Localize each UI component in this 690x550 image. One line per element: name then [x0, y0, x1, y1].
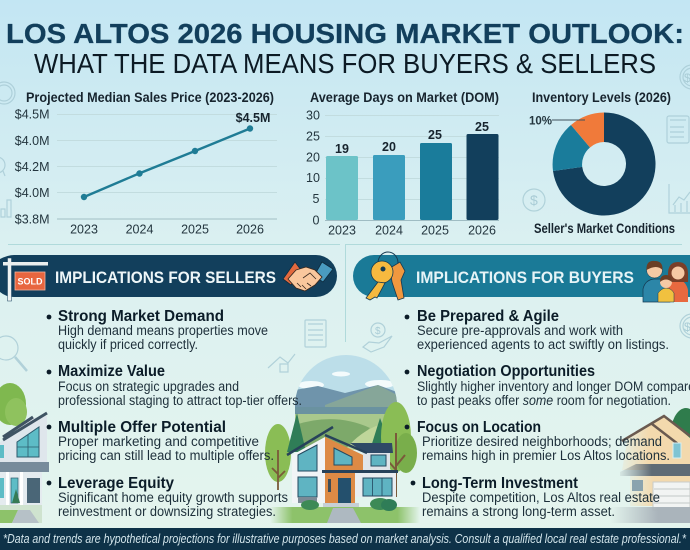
bar chart y axis labels: 10 [306, 171, 320, 185]
left tree [265, 424, 291, 490]
buyer item: focus on location: Focus on Location [417, 419, 541, 436]
buyer item: long-term investment: Despite competition, Los Altos real estate [422, 490, 660, 505]
icon: handshake [283, 262, 333, 291]
sellers heading: IMPLICATIONS FOR SELLERS [55, 268, 276, 287]
bar chart y axis labels: 25 [306, 130, 320, 144]
donut chart: inventory levels [529, 90, 675, 236]
line chart: projected median sales price [15, 90, 277, 236]
buyer item: be prepared and agile: experienced agents to act swiftly on listings. [417, 337, 669, 352]
seller item: multiple offer potential [47, 419, 274, 463]
buyer item: focus on location: Prioritize desired neighborhoods; demand [422, 434, 662, 449]
buyer item: long-term investment: remains a strong long-term asset. [422, 504, 615, 519]
seller item: maximize value: professional staging to attract top-tier offers. [58, 393, 302, 408]
panel: buyer implications list [405, 308, 690, 519]
bar x axis labels [328, 224, 496, 238]
icon: sold sign: SOLD [17, 276, 43, 286]
title line 1: LOS ALTOS 2026 HOUSING MARKET OUTLOOK: [6, 18, 684, 49]
bar value labels: 19 [335, 142, 349, 156]
price trend line [81, 125, 253, 200]
end value label: $4.5M [236, 111, 270, 125]
dollar signs on icons: $ [375, 326, 381, 337]
bar x axis labels: 2026 [468, 224, 496, 238]
bar x axis labels: 2025 [421, 224, 449, 238]
ground and path [270, 498, 420, 523]
donut callout [529, 116, 585, 128]
seller item: strong market demand [47, 308, 268, 352]
donut segments [553, 112, 656, 215]
bar chart heading: Average Days on Market (DOM) [310, 90, 499, 105]
bar chart: average days on market [306, 90, 499, 238]
bar chart y axis labels: 5 [313, 192, 320, 206]
seller item: maximize value: Focus on strategic upgrades and [58, 379, 239, 394]
seller item: maximize value: Maximize Value [58, 363, 165, 380]
line chart y axis labels [15, 108, 50, 226]
modern house [287, 427, 398, 508]
seller item: strong market demand: Strong Market Demand [58, 308, 224, 325]
bars [326, 134, 498, 220]
line chart x axis labels: 2023 [70, 222, 98, 236]
icon: family [643, 261, 688, 302]
buyer item: negotiation opportunities: Negotiation Opportunities [417, 363, 595, 380]
bar value labels: 25 [475, 120, 489, 134]
bar x axis labels: 2024 [375, 224, 403, 238]
buyer item: be prepared and agile [405, 308, 669, 352]
icon: keys [366, 252, 405, 300]
buyer item: long-term investment [411, 475, 660, 519]
dollar signs on icons [375, 71, 690, 337]
bar chart y axis labels: 0 [313, 214, 320, 228]
buyer item: focus on location: remains high in premier Los Altos locations. [422, 448, 670, 463]
donut callout: 10% [529, 116, 552, 128]
line chart y axis labels: $4.0M [15, 186, 50, 200]
line chart x axis labels [70, 222, 264, 236]
banner: sellers [0, 255, 337, 301]
illustration: central landscape [265, 355, 420, 523]
line chart y axis labels: $3.8M [15, 212, 50, 226]
bar value labels: 25 [428, 128, 442, 142]
faint finance icons [0, 65, 690, 372]
line chart y axis labels: $4.0M [15, 134, 50, 148]
buyer item: negotiation opportunities [405, 363, 690, 408]
bar chart y axis labels: 30 [306, 108, 320, 122]
seller item: strong market demand: High demand means properties move [58, 323, 268, 338]
buyer item: be prepared and agile: Secure pre-approvals and work with [417, 323, 623, 338]
seller item: leverage equity: reinvestment or downsizing strategies. [58, 504, 276, 519]
footer disclaimer [0, 528, 690, 550]
panel: seller implications list [47, 308, 302, 519]
dollar signs on icons: $ [530, 192, 538, 208]
illustration: left house [0, 383, 49, 523]
bar value labels: 20 [382, 140, 396, 154]
banner: buyers [353, 252, 690, 302]
line chart x axis labels: 2024 [126, 222, 153, 236]
seller item: multiple offer potential: Multiple Offer Potential [58, 419, 226, 436]
seller item: multiple offer potential: pricing can still lead to multiple offers. [58, 448, 274, 463]
line chart y axis labels: $4.5M [15, 108, 50, 122]
line chart heading: Projected Median Sales Price (2023-2026) [26, 90, 274, 105]
buyer item: be prepared and agile: Be Prepared & Agile [417, 308, 559, 325]
icon: sold sign [3, 258, 48, 301]
bar chart y axis labels: 20 [306, 150, 320, 164]
line chart y axis labels: $4.2M [15, 160, 50, 174]
illustration: right house [610, 408, 690, 523]
bar x axis labels: 2023 [328, 224, 356, 238]
seller item: strong market demand: quickly if priced correctly. [58, 337, 198, 352]
bar value labels [335, 120, 489, 156]
buyer item: focus on location [405, 419, 670, 463]
donut heading: Inventory Levels (2026) [532, 90, 671, 105]
seller item: leverage equity: Leverage Equity [58, 475, 174, 492]
bar chart y axis labels [306, 108, 320, 228]
section dividers [8, 244, 682, 342]
seller item: multiple offer potential: Proper marketing and competitive [58, 434, 259, 449]
buyer item: negotiation opportunities: to past peaks offer some room for negotiation. [417, 393, 671, 408]
buyer item: long-term investment: Long-Term Investment [422, 475, 579, 492]
seller item: leverage equity [47, 475, 288, 519]
buyers heading: IMPLICATIONS FOR BUYERS [416, 268, 634, 287]
right trees [381, 402, 417, 497]
line chart x axis labels: 2026 [236, 222, 264, 236]
seller item: maximize value [47, 363, 302, 408]
seller item: leverage equity: Significant home equity growth supports [58, 490, 288, 505]
line chart x axis labels: 2025 [181, 222, 209, 236]
